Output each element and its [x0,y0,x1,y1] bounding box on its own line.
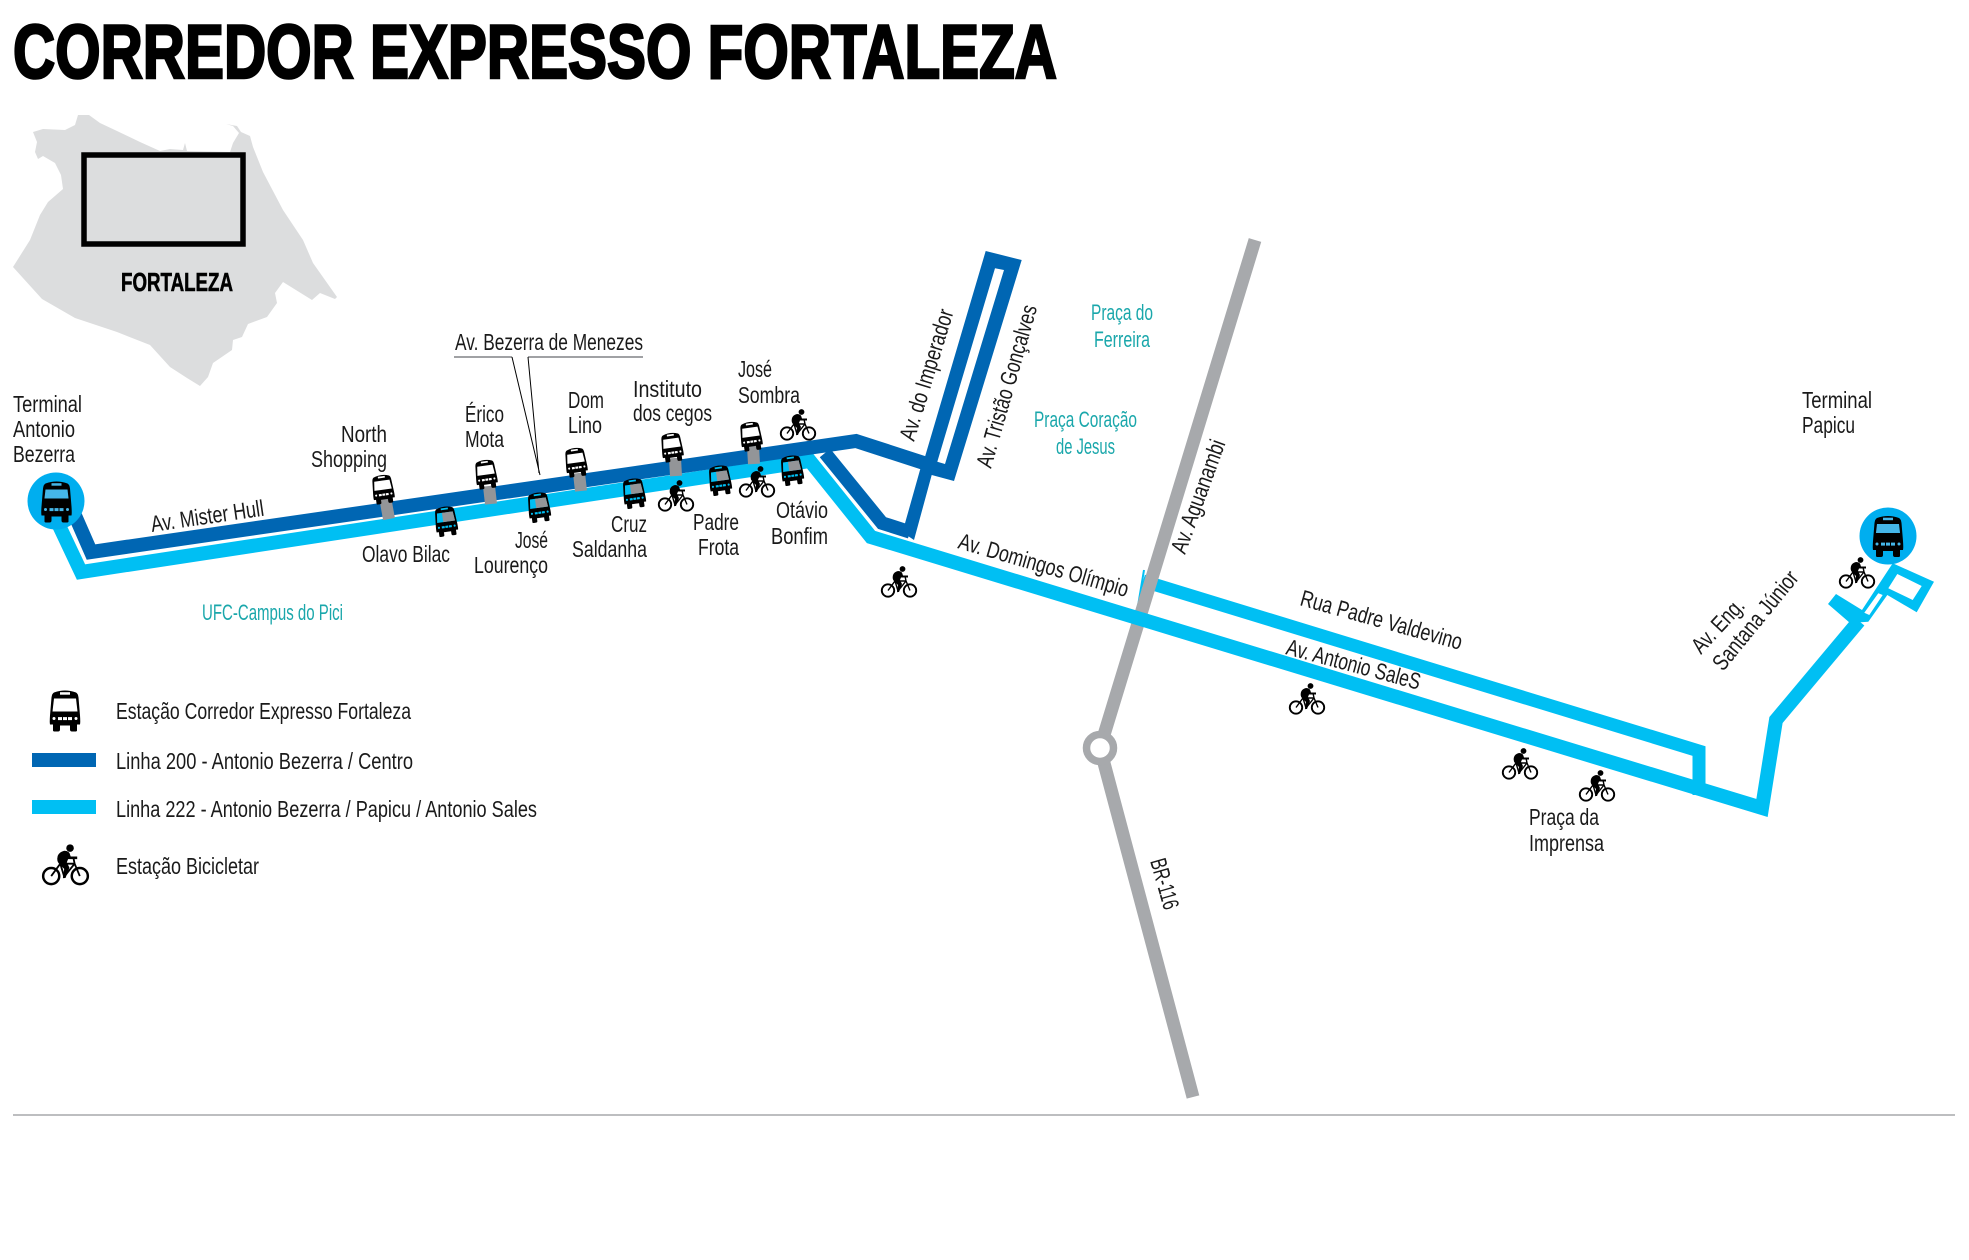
connectors: Av. Bezerra de Menezes leader lines [454,357,643,475]
label: Cruz Saldanha [572,511,647,562]
label: Av. Eng. Santana Júnior: Av. Eng. [1686,592,1750,658]
road: Av. Aguanambi and BR-116 [1086,240,1255,1097]
label: Otávio Bonfim [771,497,828,549]
label: Praça Coração de Jesus: Praça Coração [1034,407,1137,432]
label: Instituto dos cegos: Instituto [633,376,702,402]
icon: Terminal Antonio Bezerra [28,472,84,530]
label: Dom Lino: Lino [568,412,602,438]
label: North Shopping: North [341,421,387,447]
route: Rua Padre Valdevino branch [1137,570,1699,795]
label: Otávio Bonfim: Bonfim [771,523,828,549]
legend: bus station: Estação Corredor Expresso Fortaleza [116,698,411,724]
label: Av. Bezerra de Menezes: Av. Bezerra de Menezes [455,329,643,355]
route: Linha 222 main line [47,461,1934,808]
label: Praça do Ferreira: Ferreira [1094,327,1151,352]
label: Padre Frota [693,509,739,560]
label: Instituto dos cegos: dos cegos [633,400,712,426]
legend: Linha 222: Linha 222 - Antonio Bezerra / Papicu / Antonio Sales [116,796,537,822]
panel: legend [32,690,537,884]
legend: Linha 200: Linha 200 - Antonio Bezerra / Centro [116,748,413,774]
label: Terminal Antonio Bezerra: Bezerra [13,441,75,467]
label: Av. Eng. Santana Júnior [1686,565,1804,675]
label: José Lourenço: Lourenço [474,552,548,578]
label: Praça Coração de Jesus [1034,407,1137,459]
label: Padre Frota: Frota [698,534,739,560]
label: José Lourenço [474,527,548,578]
label: Praça da Imprensa: Imprensa [1529,830,1604,856]
label: Av. Aguanambi: Av. Aguanambi [1165,436,1230,557]
legend: bicycle station: Estação Bicicletar [116,853,259,879]
label: Terminal Papicu [1802,387,1872,438]
label: UFC-Campus do Pici: UFC-Campus do Pici [202,600,343,625]
legend: bicycle station [43,844,259,884]
label: Rua Padre Valdevino: Rua Padre Valdevino [1298,585,1465,655]
label: Cruz Saldanha: Saldanha [572,536,647,562]
icons: upper bus stations [370,421,764,505]
label: José Sombra: Sombra [738,382,800,408]
label: Padre Frota: Padre [693,509,739,535]
map shape [13,115,337,386]
label: North Shopping: Shopping [311,446,387,472]
label: Érico Mota [465,401,504,452]
legend: Linha 222 [32,796,537,822]
label: Dom Lino: Dom [568,387,604,413]
label: BR-116: BR-116 [1145,855,1185,912]
label: Olavo Bilac: Olavo Bilac [362,541,450,567]
icon: Terminal Papicu [1860,508,1916,564]
label: Praça Coração de Jesus: de Jesus [1056,434,1115,459]
label: Terminal Antonio Bezerra [13,391,82,467]
label: Av. Mister Hull: Av. Mister Hull [149,495,266,537]
label: José Lourenço: José [515,527,548,553]
label: Érico Mota: Mota [465,426,504,452]
label: Cruz Saldanha: Cruz [611,511,647,537]
locator rectangle [84,155,243,244]
label: Praça do Ferreira: Praça do [1091,300,1153,325]
legend: Linha 200 [32,748,413,774]
route: Linha 200 [66,251,1022,552]
label: North Shopping [311,421,387,472]
label: Praça do Ferreira [1091,300,1153,352]
label: Terminal Antonio Bezerra: Antonio [13,416,75,442]
label: Av. Eng. Santana Júnior: Santana Júnior [1707,565,1804,675]
label: Otávio Bonfim: Otávio [776,497,828,523]
legend: bus station [50,690,411,732]
panel: locator map of Fortaleza [13,115,337,386]
label: José Sombra: José [738,356,772,382]
label: Érico Mota: Érico [465,401,504,427]
icons: lower bus stations [433,454,805,538]
map label: FORTALEZA [121,267,233,297]
label: Praça da Imprensa [1529,804,1604,856]
label: Dom Lino [568,387,604,438]
title: CORREDOR EXPRESSO FORTALEZA [13,10,1057,95]
label: Terminal Papicu: Papicu [1802,412,1855,438]
label: Av. do Imperador: Av. do Imperador [894,306,959,443]
label: Praça da Imprensa: Praça da [1529,804,1599,830]
label: Terminal Antonio Bezerra: Terminal [13,391,82,417]
label: Av. Antonio SaleS: Av. Antonio SaleS [1284,634,1424,695]
label: Instituto dos cegos [633,376,712,426]
label: Av. Tristão Gonçalves: Av. Tristão Gonçalves [971,302,1042,470]
icons: bicycle stations [659,409,1874,801]
label: Terminal Papicu: Terminal [1802,387,1872,413]
label: José Sombra [738,356,800,408]
station links [385,446,754,519]
label: Av. Domingos Olímpio: Av. Domingos Olímpio [956,528,1132,602]
